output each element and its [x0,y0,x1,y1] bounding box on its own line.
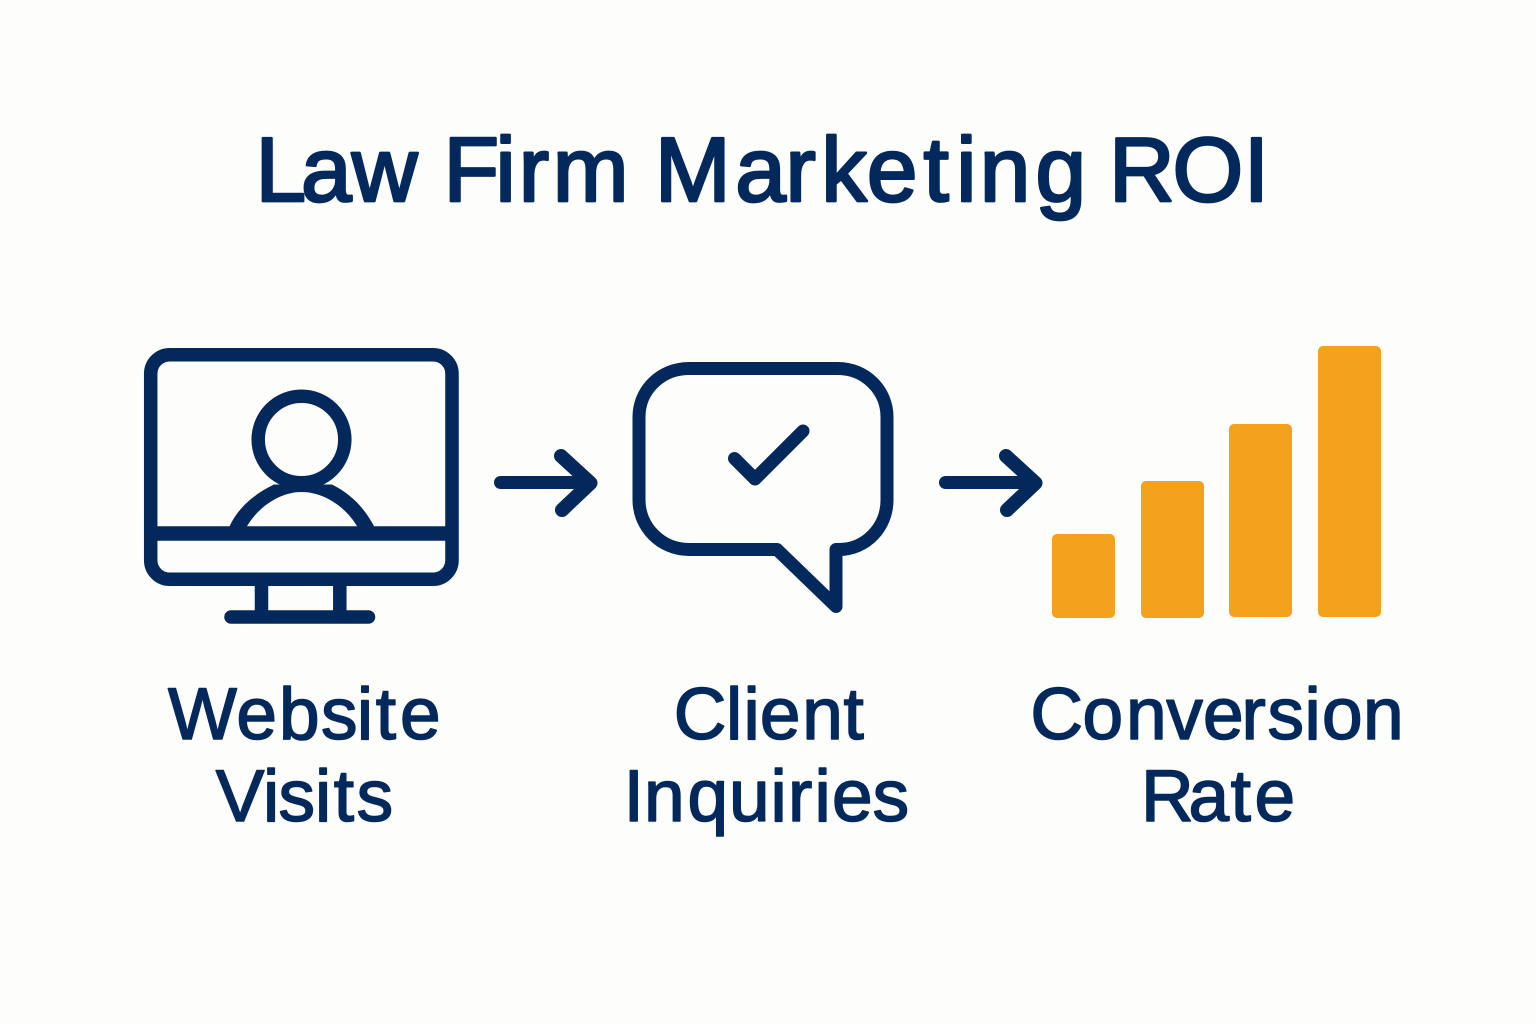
label: conversion rate [1030,674,1404,837]
label: conversion rate: Rate [1141,756,1295,837]
label: website visits [168,674,441,837]
arrow: inquiries to conversion [946,456,1036,510]
icon: speech bubble with check [639,368,887,606]
title [256,120,1269,221]
label: client inquiries [624,674,909,837]
icon: monitor with user [151,355,452,617]
icon: bar chart [1052,346,1381,618]
title: Firm [444,120,629,221]
label: website visits: Website [168,674,441,755]
label: website visits: Visits [216,756,393,837]
label: client inquiries: Inquiries [624,756,909,837]
label: client inquiries: Client [674,674,864,755]
title: ROI [1109,120,1269,221]
title: Marketing [655,120,1086,221]
label: conversion rate: Conversion [1030,674,1404,755]
arrow: visits to inquiries [500,456,590,510]
title: Law [256,120,418,221]
